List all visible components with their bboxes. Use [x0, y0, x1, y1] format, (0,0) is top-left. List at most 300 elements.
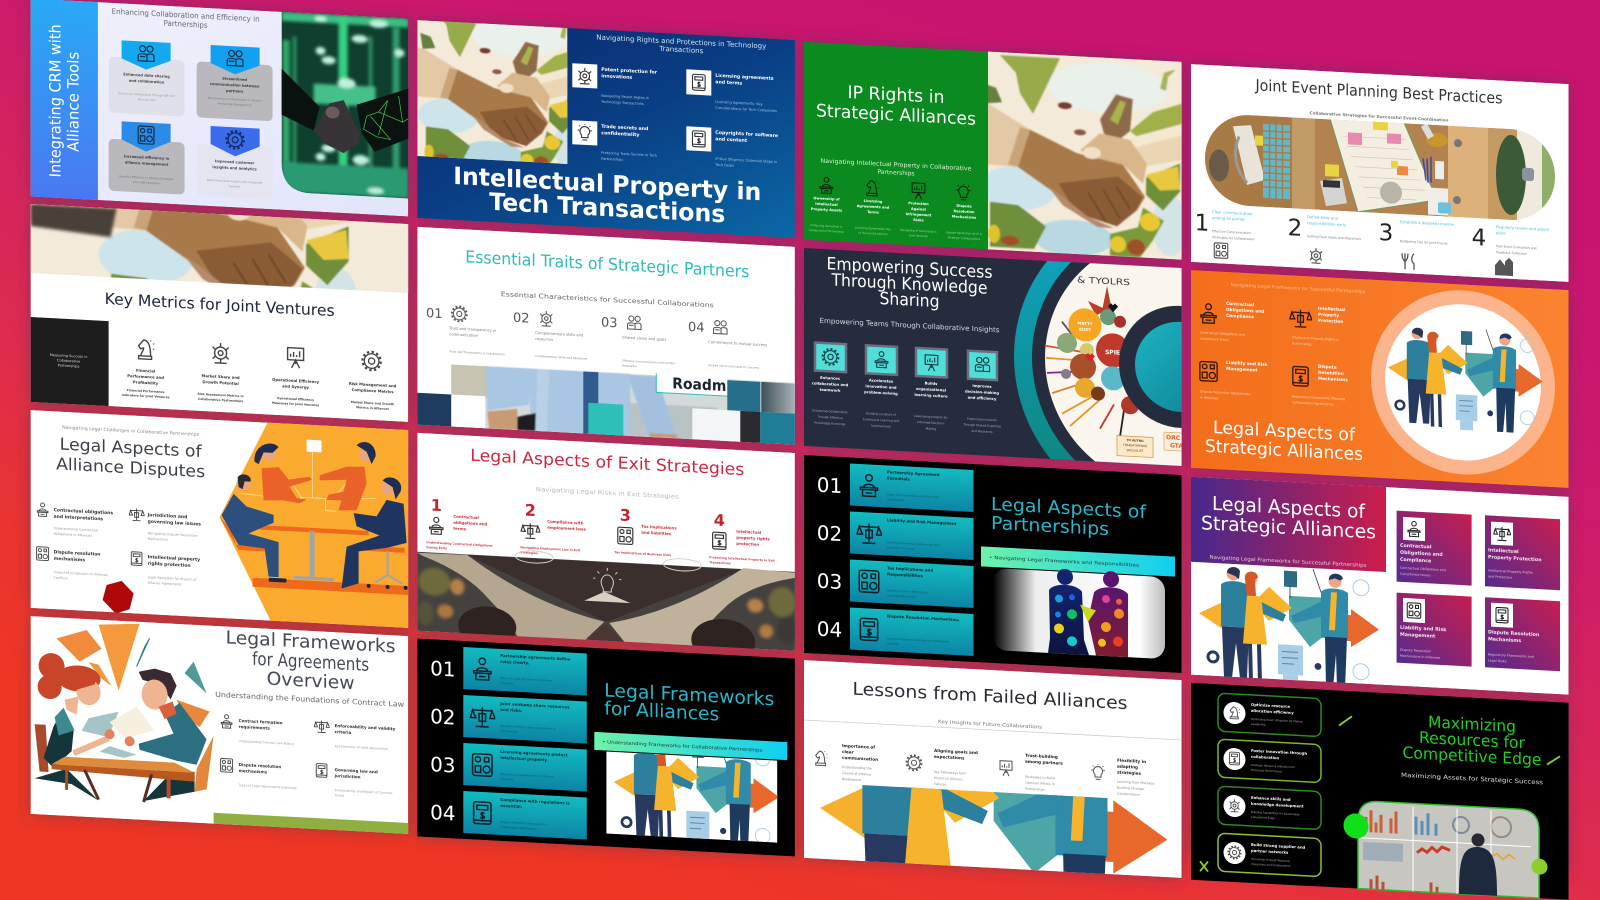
item: decision making [962, 350, 1001, 434]
illustration: partners in circle [1371, 286, 1555, 479]
item: patent protection: Technology Transactions [600, 100, 644, 106]
item: patent protection: innovations [601, 73, 632, 81]
item 01: 01 [426, 306, 443, 322]
step 4: 4 [1472, 225, 1486, 252]
item: trust building: Common Pitfalls in [1025, 781, 1055, 786]
row: enhance skills: Competitive Edge [1251, 815, 1275, 820]
photo: presenter with roadmap board [417, 360, 795, 445]
row 03 [430, 741, 587, 791]
item: jurisdiction: governing law issues [148, 519, 201, 528]
item: dispute: Dispute [956, 204, 972, 209]
item: protection: Joint Ventures [908, 233, 928, 238]
item: contractual obligations: Understanding Contractual [54, 526, 98, 533]
subtitle: Understanding the Foundations of Contract Law [215, 690, 404, 709]
panel: Legal Aspects of Strategic Alliances (purple) [1191, 477, 1569, 701]
subtitle: Maximizing Assets for Strategic Success [1401, 772, 1543, 786]
item: dispute resolution: mechanisms [239, 768, 268, 775]
step 2: Define roles and [1307, 214, 1339, 221]
illustration: arguing couple [35, 618, 214, 807]
row 03: intellectual property. [500, 755, 548, 762]
step 1: 1 [1195, 210, 1209, 237]
row 04: Collaborative Agreements [500, 825, 537, 831]
step 3: 3 [620, 506, 631, 525]
row 02: Liability and Risk Management [887, 517, 957, 526]
item: dispute resolution: Dispute resolution [239, 762, 281, 769]
card: dispute resolution: Legal Risks [1488, 658, 1507, 663]
metric: operational efficiency: Operational Efficiency [272, 377, 320, 384]
card: contractual obligations: Obligations and [1400, 550, 1443, 558]
item 02: Complementary skills and [535, 331, 583, 337]
card: liability: Dispute Resolution [1400, 648, 1431, 653]
row 01: roles clearly. [500, 659, 530, 665]
item: trade secrets: confidentiality [601, 130, 639, 138]
item: jurisdiction: Jurisdiction and [147, 512, 187, 520]
illustration: knowledge mind map in concentric rings [1014, 198, 1330, 531]
item: licensing [686, 69, 777, 113]
item: collaboration [812, 342, 849, 426]
item: flexibility: Learning from Mistakes: [1117, 780, 1155, 786]
item: governing law: Enforceability and Breach of Contract [335, 788, 393, 795]
item: governing law: Issues [335, 793, 345, 798]
panel: Integrating CRM with Alliance Tools [31, 0, 409, 217]
row 04: Conflicts [887, 641, 900, 646]
item: communication: clear [842, 749, 855, 755]
step 4: Intellectual [736, 529, 761, 535]
item: trust building: among partners [1025, 759, 1063, 766]
item: flexibility: adapting [1117, 764, 1138, 770]
item: flexibility: strategies [1117, 770, 1141, 776]
card: contractual obligations: Compliance [1400, 557, 1432, 564]
step 3: Tax implications [641, 524, 677, 531]
panel: Joint Event Planning Best Practices [1191, 64, 1569, 282]
item: innovation: Continuous Learning and [863, 417, 899, 423]
item: ownership: Property Assets [811, 207, 842, 213]
item: learning culture: learning culture [914, 393, 948, 399]
item: contractual obligations: Contractual [1226, 301, 1255, 308]
item: protection: Navigating IP Ownership in [900, 228, 937, 234]
panel: Legal Aspects of Exit Strategies [417, 433, 797, 667]
sidebar [31, 0, 98, 200]
title band: Legal Aspects of [1212, 493, 1366, 523]
panel: Key Metrics for Joint Ventures [30, 204, 408, 422]
item: innovation: Accelerates [869, 378, 894, 384]
card: data sharing: Sharing Data [138, 97, 156, 102]
card: intellectual property: Property Protection [1488, 554, 1542, 563]
illustration: knowledge mind map in concentric rings: SPIE [1105, 349, 1120, 357]
card: insights: Improved customer [215, 159, 255, 165]
card: communication [197, 44, 273, 121]
row 03: Tax Implications and [887, 565, 933, 573]
item: learning culture: Making [926, 426, 936, 431]
card: efficiency: with CRM Integration [132, 180, 161, 185]
slide title: Legal Frameworks [604, 680, 774, 710]
panel: Legal Frameworks for Agreements Overview [31, 616, 409, 834]
item: dispute resolution: Conflicts [54, 576, 68, 580]
item: dispute resolution [221, 758, 297, 790]
item 03: Resolution [622, 364, 637, 368]
step 2: 2 [1288, 215, 1302, 242]
illustration: two silhouettes filled with gears [993, 565, 1165, 659]
card: liability: Liability and Risk [1400, 625, 1447, 633]
metric: operational efficiency: Operational Efficiency [277, 396, 314, 402]
item: innovation: innovation and [865, 384, 897, 390]
item: liability: Management [1226, 366, 1258, 374]
subtitle: Enhancing Collaboration and Efficiency in [112, 7, 260, 24]
gradient strip caption: • Understanding Frameworks for Collaborative Partnerships [602, 739, 763, 754]
illustration: knowledge mind map in concentric rings: ORC [1166, 434, 1181, 442]
item: aligning goals [906, 746, 978, 788]
item 01: Trust and Transparency in Collaboration [448, 349, 505, 356]
step 3 [1379, 218, 1455, 272]
item: decision making: Improves [972, 384, 992, 389]
item: jurisdiction: Mechanisms [148, 537, 168, 542]
row 03: Liability Issues in Partnership: [887, 588, 929, 595]
item: communication: Breakdowns [842, 777, 862, 782]
item: enforceability: criteria [335, 729, 352, 735]
item: aligning goals: Historical Alliance [934, 776, 962, 781]
photo: handshake over map [417, 20, 568, 164]
metric: market share: Risk Assessment Metrics in [198, 392, 244, 398]
item: copyrights: Copyrights for software [715, 130, 778, 139]
item: decision making: decision-making [965, 390, 999, 395]
item: aligning goals: Failures [934, 782, 946, 787]
card: dispute resolution: Regulatory Frameworks and [1488, 652, 1534, 659]
title band [1191, 477, 1386, 572]
sidebar: measuring success: Measuring Success in [50, 353, 87, 359]
accent cross [1200, 861, 1208, 872]
illustration: negotiation around table [220, 420, 409, 628]
item: intellectual property: Legal Remedies for Breach of [148, 575, 197, 582]
step 1: obligations and [453, 520, 488, 527]
item: collaboration: teamwork [820, 388, 841, 393]
item: ownership: Collaborative Partnerships [809, 228, 845, 234]
card: efficiency: Boosting Efficiency in Alliance Strategies [119, 174, 175, 181]
row: supplier networks: Innovation through Resource [1251, 857, 1290, 863]
photo: handshake over map [988, 52, 1182, 260]
illustration: partners shaking hands [1199, 563, 1379, 691]
step 1 [426, 495, 493, 553]
metric: risk management: Compliance Metrics [352, 387, 394, 394]
step 4: Post-Event Evaluation and [1496, 244, 1537, 250]
item: patent protection [572, 63, 658, 107]
photo: presenter with roadmap board: Roadm [672, 374, 726, 395]
card: contractual obligations: Contractual [1400, 543, 1432, 550]
metric: market share: Growth Potential [202, 379, 239, 386]
card: contractual obligations: Contractual Obligations and [1400, 566, 1446, 572]
item: collaboration: Enhances [820, 376, 841, 381]
photo: planning desk in rounded pill [1205, 110, 1556, 222]
item: contract formation: Understanding Contract Law Basics [239, 739, 294, 746]
row 04: 04 [817, 617, 842, 642]
item: contractual obligations: Obligations and [1226, 307, 1264, 315]
item: dispute: Resolution [953, 209, 975, 214]
item: ownership: Intellectual [815, 202, 838, 207]
row 04 [817, 606, 974, 656]
row 01: 01 [430, 656, 456, 682]
item: flexibility: Flexibility in [1117, 758, 1146, 764]
item: collaboration: Knowledge Exchange [815, 421, 846, 426]
item: learning culture: Informed Decision- [917, 420, 945, 425]
row: enhance skills: knowledge development [1251, 801, 1304, 809]
item: enforceability: Enforceability and validity [335, 723, 396, 731]
item: aligning goals: Aligning goals and [934, 748, 978, 755]
metric: operational efficiency [272, 347, 320, 407]
row 02: Benefits of Formal Legal Agreements in [500, 724, 556, 731]
subtitle: Empowering Teams Through Collaborative Insights [819, 317, 1000, 334]
step 4: 4 [714, 511, 725, 530]
item: flexibility: Building Stronger [1117, 786, 1145, 791]
subtitle: Key Insights for Future Collaborations [938, 719, 1043, 731]
item: innovation: Building a Culture of [866, 411, 897, 417]
item: dispute: Mechanisms [952, 215, 976, 220]
item 01 [426, 305, 505, 356]
item: dispute resolution: Impact of Jurisdiction on Alliance [54, 570, 108, 577]
metric: risk management [349, 351, 397, 411]
item: licensing: Licensing Agreements: Key [855, 225, 892, 231]
item: contractual obligations: Contractual Obligations and [1200, 330, 1245, 337]
step 4: protection [736, 541, 759, 547]
card: data sharing [109, 40, 185, 117]
card: intellectual property [1485, 515, 1560, 590]
step 1: 1 [431, 496, 442, 515]
row 01: Types of Partnerships and Their Legal [886, 492, 939, 499]
card: dispute resolution: Dispute Resolution [1488, 629, 1540, 638]
item: jurisdiction [129, 508, 201, 544]
row 01: Types of Legal Structures in Business [499, 676, 553, 683]
step 4: plans [1496, 230, 1506, 236]
item 02 [513, 309, 588, 361]
slide title: Partnerships [991, 513, 1109, 540]
slide title: Legal Frameworks [226, 627, 396, 657]
item 04 [688, 319, 767, 370]
item: intellectual property [1290, 304, 1346, 348]
item: communication: Importance of [842, 743, 875, 750]
slide title: Intellectual Property in [453, 162, 761, 206]
metric: risk management: Market Share and Growth [351, 400, 394, 406]
slide title: for Alliances [604, 698, 719, 726]
row: foster innovation: collaboration [1251, 754, 1279, 760]
photo: forked road with lightbulb [417, 545, 797, 667]
item: liability: Liability and Risk [1226, 360, 1268, 368]
step 3: Establish a detailed timeline [1400, 219, 1455, 227]
item: intellectual property: Protection [1318, 318, 1343, 325]
item: licensing: Agreements and [857, 204, 890, 210]
step 1 [1195, 208, 1255, 260]
item: aligning goals: Key Takeaways from [934, 770, 966, 776]
card: contractual obligations [1397, 511, 1472, 586]
card: communication: partners [226, 89, 243, 94]
item: contractual obligations [1200, 299, 1264, 344]
item: enforceability [314, 720, 396, 751]
lime dot [1532, 858, 1548, 875]
item: trust building: Trust-building [1025, 753, 1058, 759]
step 4: Transactions [709, 560, 731, 565]
card: liability [1397, 593, 1472, 667]
subtitle: Navigating Rights and Protections in Technology [596, 33, 766, 50]
item: ownership: Ownership of [813, 196, 840, 202]
item: contract formation: Contract formation [239, 718, 283, 725]
slide title: Key Metrics for Joint Ventures [105, 290, 335, 320]
metric: financial performance: Performance and [127, 373, 164, 380]
metric: financial performance: Financial Performance [127, 388, 165, 394]
card: insights: Systems [229, 184, 241, 189]
item: communication: communication [842, 755, 878, 762]
panel: IP Rights in Strategic Alliances [788, 0, 1488, 478]
row 01: Partnership Agreement [887, 469, 940, 477]
row 02: and risks. [500, 707, 523, 713]
item: intellectual property: Intellectual Property Rights in [1292, 335, 1339, 342]
slide title: IP Rights in [847, 83, 944, 108]
card: insights [197, 125, 273, 199]
item: trade secrets: Partnerships [601, 157, 623, 162]
step 1: among all parties [1212, 215, 1245, 222]
slide title: Tech Transactions [489, 188, 725, 228]
item: contractual obligations: Contractual obligations [54, 507, 113, 516]
item: patent protection: Patent protection for [601, 67, 658, 76]
item: copyrights [686, 126, 778, 170]
slide title: Integrating CRM with [47, 24, 65, 178]
item: intellectual property: Partnerships [1292, 341, 1312, 346]
row: supplier networks [1218, 833, 1321, 877]
item: contract formation: requirements [239, 724, 270, 731]
card: insights: insights and analytics [212, 165, 257, 171]
item: dispute [946, 183, 982, 241]
metric: financial performance [122, 339, 170, 399]
step 2 [1288, 213, 1361, 266]
item: aligning goals: expectations [934, 754, 965, 761]
slide title: Legal Aspects of [991, 494, 1147, 523]
item: trust building: Partnerships [1025, 787, 1045, 792]
row 01: Implications [887, 497, 904, 502]
card: data sharing: Enhancing Collaboration Through Efficient [118, 91, 175, 98]
item: innovation: Improvement [871, 424, 892, 429]
photo: analyst viewing chart wall [1358, 801, 1539, 898]
row: supplier networks: partner networks [1251, 848, 1289, 855]
item: dispute resolution: mechanisms [54, 556, 85, 563]
row 04 [430, 789, 587, 839]
step 4: Protecting Intellectual Property in Exit [709, 555, 775, 563]
slide title: Alliance Disputes [56, 454, 205, 481]
item 03: Shared vision and goals [622, 336, 666, 342]
item: licensing: Licensing Agreements: Key [715, 100, 763, 106]
item: contractual obligations: Compliance Risks [1200, 336, 1228, 342]
item: protection: Risks [913, 218, 924, 223]
item: intellectual property: Property [1318, 312, 1339, 319]
row 03: Understanding Risks [887, 593, 916, 599]
item 03 [601, 314, 676, 370]
item: communication [816, 742, 878, 783]
step 3: 3 [1379, 220, 1393, 247]
step 2: Strategies [520, 550, 538, 555]
item: decision making: and efficiency [968, 396, 997, 401]
metric: financial performance: Profitability [133, 379, 159, 386]
item: jurisdiction: Navigating Dispute Resolution [148, 531, 197, 538]
item: contract formation [221, 714, 294, 746]
step 2: Setting Clear Goals and Objectives [1307, 234, 1361, 241]
slide title: Through Knowledge [831, 270, 987, 299]
item: contractual obligations: and interpretations [54, 514, 103, 522]
step 2: responsibilities early [1307, 220, 1347, 227]
item: protection: Against [911, 207, 926, 212]
step 4: Regularly review and adjust [1496, 224, 1549, 232]
item: trade secrets [572, 120, 657, 164]
row 03: 03 [430, 752, 456, 778]
item: dispute resolution: Dispute resolution [54, 549, 101, 558]
step 1: Understanding Contractual Obligations [426, 540, 493, 548]
slide title: Joint Event Planning Best Practices [1255, 76, 1503, 108]
item: copyrights: and content [715, 136, 748, 144]
row 03: Regulatory Considerations for Alliance [500, 772, 554, 779]
row 02: 02 [430, 704, 456, 730]
slide title: for Agreements [252, 649, 369, 676]
gradient strip caption [981, 546, 1175, 577]
item: dispute resolution: Types of Legal Agreements Explained [238, 783, 297, 790]
row 01 [817, 462, 974, 512]
row: foster innovation [1218, 739, 1321, 783]
metric: operational efficiency: Measures for Joint Ventures [272, 401, 319, 407]
row: foster innovation: Strategic Resource Allocation for [1251, 763, 1296, 769]
item: liability: in Alliances [1200, 395, 1218, 400]
card: intellectual property: Intellectual [1488, 547, 1519, 555]
illustration: knowledge mind map in concentric rings: MATTY [1077, 320, 1093, 326]
panel: Legal Aspects of Strategic Alliances (orange) [1191, 270, 1569, 488]
item: licensing: and terms [715, 79, 742, 87]
row 03: Members [500, 777, 514, 782]
step 1: Clear communication [1212, 209, 1253, 216]
row: enhance skills [1218, 786, 1321, 830]
row: enhance skills: Enhance skills and [1251, 795, 1291, 802]
panel: Essential Traits of Strategic Partners [417, 227, 795, 445]
item: communication: Understanding the [842, 765, 872, 771]
gradient strip caption [594, 732, 787, 760]
step 1: Effective Communication [1212, 229, 1251, 235]
item 04: 04 [688, 320, 705, 336]
row 04: essential. [500, 803, 523, 809]
metric: financial performance: Indicators for Joint Ventures [122, 393, 170, 399]
item: trade secrets: Trade secrets and [601, 124, 648, 132]
accent dash [1547, 756, 1560, 765]
item: contractual obligations [37, 503, 113, 539]
row: enhance skills: Building Capabilities for Sustainable [1251, 810, 1300, 816]
item: copyrights: IP Due Diligence: Essential Steps in [715, 157, 777, 164]
step 1: Contractual [453, 514, 479, 520]
item 01: Trust and transparency in [448, 326, 497, 333]
row 02: 02 [817, 521, 842, 546]
item: collaboration: collaboration and [812, 381, 849, 387]
card: intellectual property: Intellectual Property Rights [1488, 568, 1533, 575]
step 2 [520, 500, 587, 558]
subtitle: Transactions [658, 45, 704, 55]
row: optimize allocation: allocation efficiency [1251, 708, 1294, 715]
metric: financial performance: Financial [136, 368, 155, 374]
metric: market share: Market Share and [202, 373, 240, 380]
step 3: Budgeting Tips for Joint Events [1400, 239, 1448, 246]
photo: handshake in server room [280, 12, 409, 201]
slide title: Legal Aspects of [1213, 418, 1356, 446]
illustration: knowledge mind map in concentric rings: GTA [1170, 442, 1183, 450]
step 2: employment laws [547, 525, 587, 532]
row: foster innovation: Foster innovation through [1251, 748, 1307, 756]
item: licensing: Considerations for Tech Companies [715, 106, 777, 113]
card: efficiency: Increased efficiency in [124, 154, 170, 161]
item 04: Shared Vision and Goals for Success [708, 363, 760, 370]
panel: Maximizing Resources for Competitive Edge [1191, 683, 1569, 900]
subtitle: Collaborative Strategies for Successful Event Coordination [1310, 110, 1449, 123]
row 03: Responsibilities [887, 571, 923, 578]
row 04: Dispute Resolution Mechanisms in [500, 820, 548, 826]
panel: Legal Aspects of Alliance Disputes [31, 410, 409, 629]
item: trust building: Strategies to Avoid [1025, 775, 1055, 780]
